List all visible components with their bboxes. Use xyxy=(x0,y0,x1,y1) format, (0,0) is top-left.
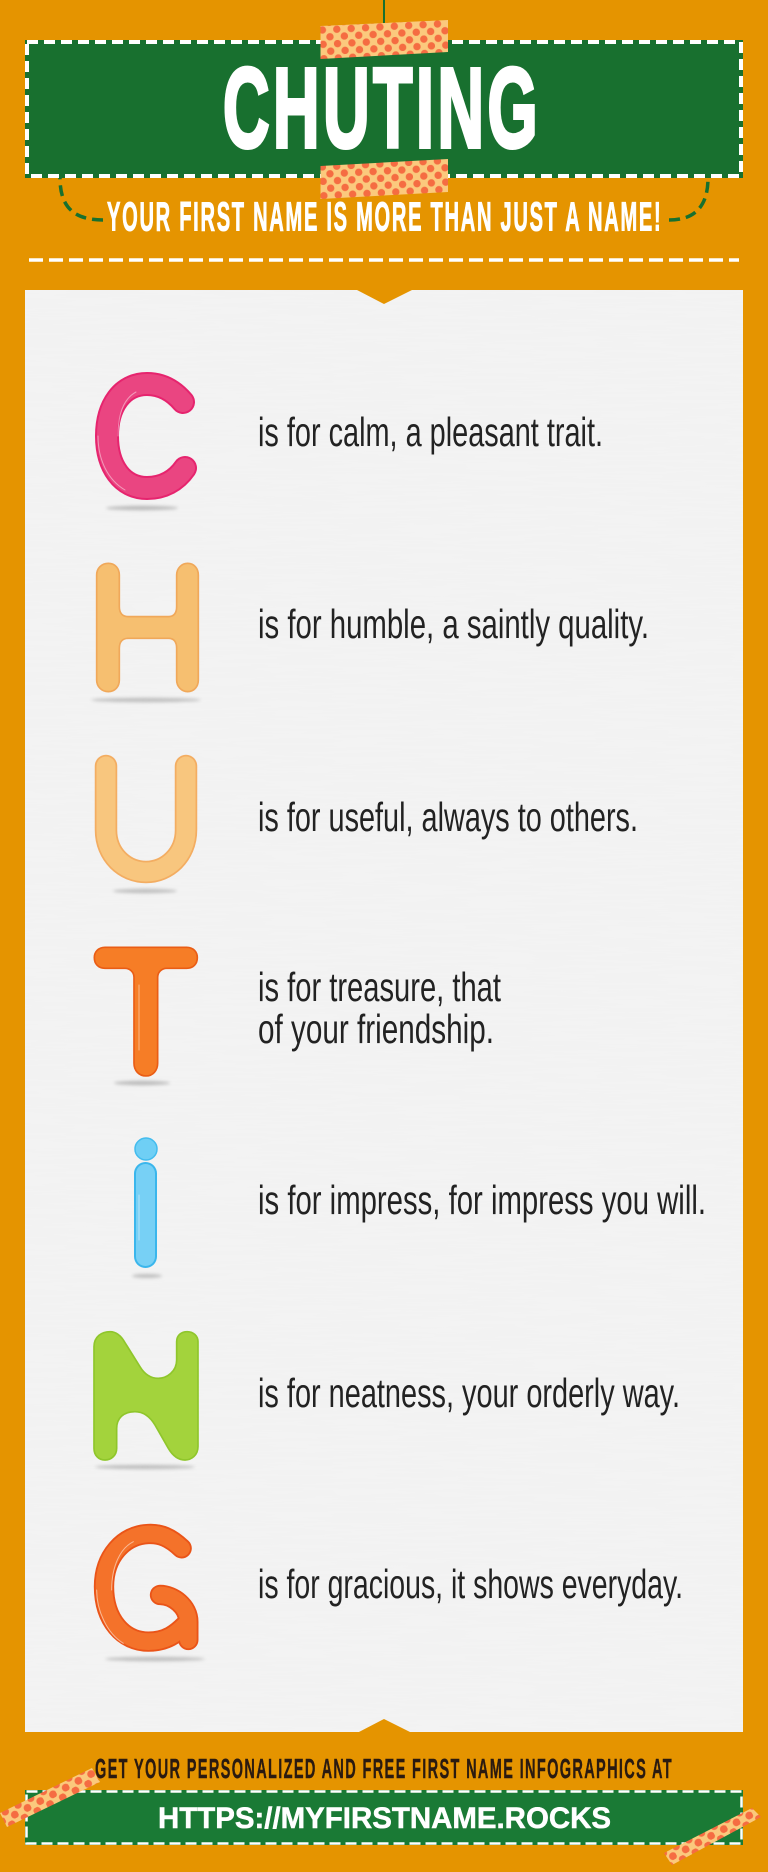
subtitle: YOUR FIRST NAME IS MORE THAN JUST A NAME! xyxy=(107,194,661,239)
row: C xyxy=(98,384,603,510)
tape: footer right xyxy=(664,1808,761,1865)
bracket: right xyxy=(669,178,708,220)
text: T lines xyxy=(258,964,501,1052)
text: T lines: is for treasure, that xyxy=(258,964,501,1010)
row: N xyxy=(94,1332,680,1469)
row: U xyxy=(106,766,638,893)
hanging string xyxy=(383,0,385,25)
tape: bottom xyxy=(320,159,448,199)
text: T lines: of your friendship. xyxy=(258,1006,494,1052)
row: G xyxy=(97,1534,683,1661)
footer banner xyxy=(25,1790,743,1845)
letter N xyxy=(94,1332,198,1469)
row: H xyxy=(91,563,649,702)
letter T xyxy=(94,947,197,1085)
header banner xyxy=(25,40,743,178)
title: CHUTING xyxy=(223,46,538,172)
tape: top xyxy=(320,20,448,59)
tape: footer left xyxy=(0,1768,100,1827)
footer prompt: GET YOUR PERSONALIZED AND FREE FIRST NAME INFOGRAPHICS AT xyxy=(95,1753,672,1784)
letter H xyxy=(91,563,201,702)
bracket: left xyxy=(60,178,103,220)
row: I xyxy=(132,1138,706,1278)
footer URL: HTTPS://MYFIRSTNAME.ROCKS xyxy=(158,1802,611,1835)
text: C line: is for calm, a pleasant trait. xyxy=(258,409,603,455)
letter i xyxy=(132,1138,162,1278)
dashed divider xyxy=(29,258,739,262)
letter G xyxy=(97,1534,205,1661)
row: T xyxy=(94,947,501,1085)
letter C xyxy=(98,384,185,510)
letter U xyxy=(106,766,186,893)
main panel xyxy=(25,290,743,1733)
